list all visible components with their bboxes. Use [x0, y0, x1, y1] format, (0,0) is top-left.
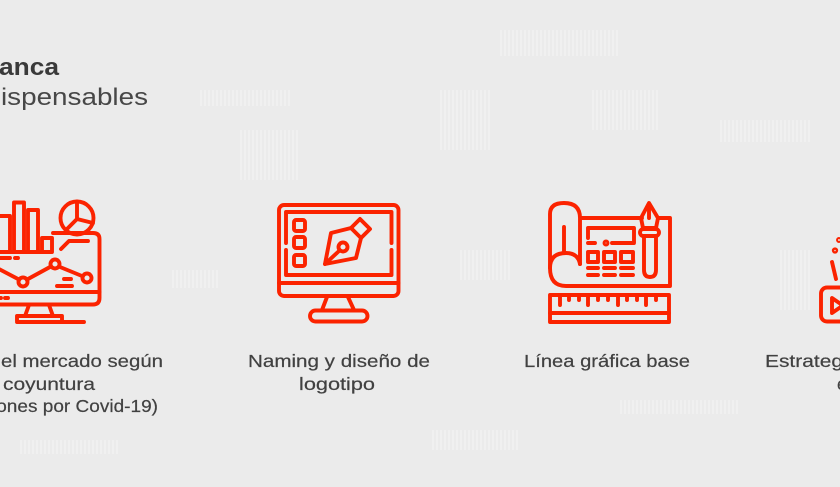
icon: video marketing, cropped at edge [821, 239, 840, 322]
label: base graphic line: Línea gráfica base [524, 351, 690, 371]
icon: market analysis monitor [0, 202, 100, 322]
label: market analysis: coyuntura [3, 374, 95, 394]
icon: monitor with pen nib [279, 205, 398, 322]
label: market analysis [0, 351, 163, 416]
label: naming [248, 351, 430, 394]
label: strategy: Estrateg [765, 351, 840, 371]
heading: anca [0, 54, 60, 81]
label: market analysis: el mercado según [1, 351, 163, 371]
label: strategy [765, 351, 840, 394]
label: naming: logotipo [299, 374, 375, 394]
heading [0, 54, 148, 111]
label: naming: Naming y diseño de [248, 351, 430, 371]
icon: design plan, calculator and ruler [550, 203, 670, 322]
heading: ispensables [1, 84, 148, 111]
